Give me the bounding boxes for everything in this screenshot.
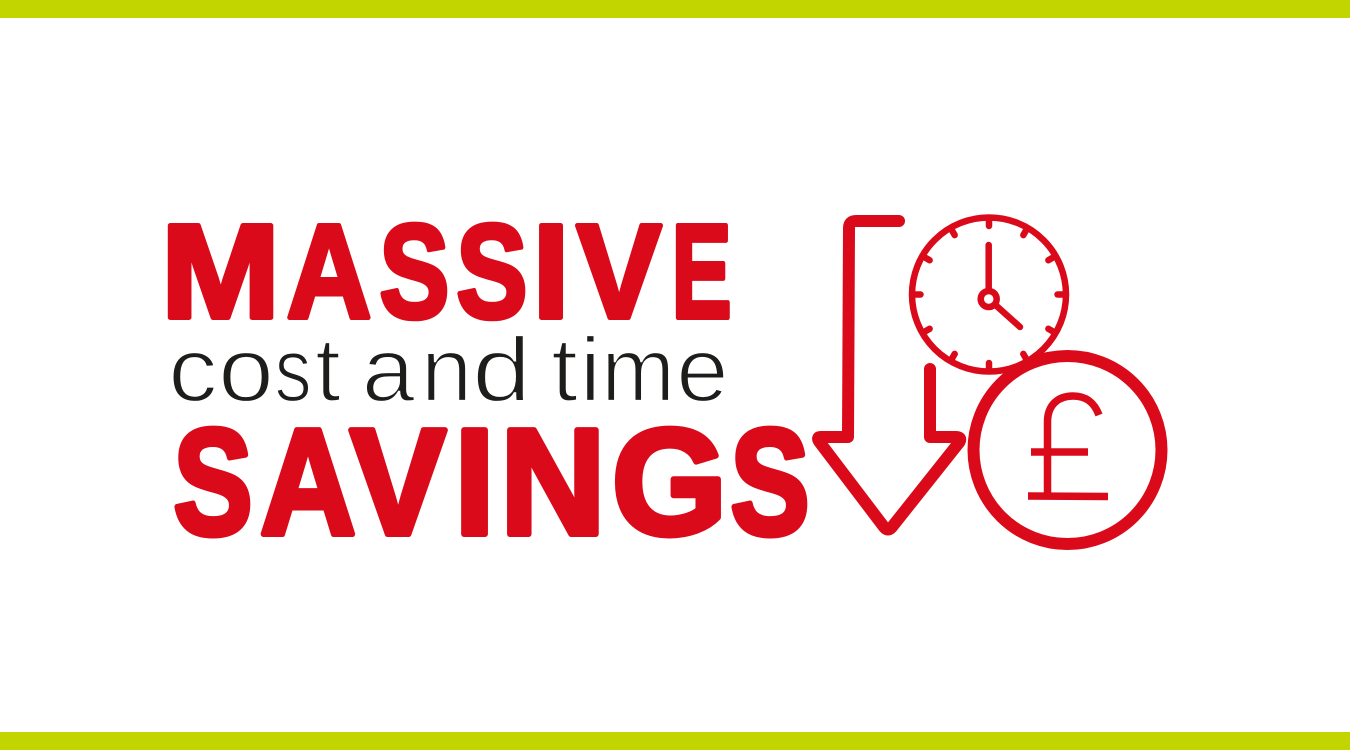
heading: SAVINGS: I xyxy=(454,397,495,566)
heading: MASSIVE: A xyxy=(286,198,372,346)
heading: SAVINGS: S xyxy=(730,397,810,566)
subheading: cost and time: s xyxy=(275,320,312,421)
icon: down arrow xyxy=(818,221,960,530)
heading: MASSIVE: I xyxy=(533,198,569,346)
coin ring xyxy=(974,356,1162,544)
subheading: cost and time: m xyxy=(601,320,675,421)
icon: pound coin xyxy=(974,356,1162,544)
heading: MASSIVE: M xyxy=(161,198,280,346)
subheading: cost and time: a xyxy=(362,320,415,421)
bottom green bar xyxy=(0,732,1350,750)
heading: SAVINGS: S xyxy=(173,397,253,566)
clock hands xyxy=(981,245,1020,327)
heading: MASSIVE: E xyxy=(672,198,732,346)
clock face xyxy=(912,218,1066,372)
heading: MASSIVE: S xyxy=(456,198,528,346)
pound symbol xyxy=(1028,396,1108,496)
subheading: cost and time: t xyxy=(315,320,341,421)
subheading: cost and time: o xyxy=(218,320,274,421)
subheading: cost and time: e xyxy=(676,320,729,421)
heading: SAVINGS: A xyxy=(260,397,356,566)
heading: SAVINGS: N xyxy=(500,397,606,566)
subheading: cost and time: n xyxy=(421,320,472,421)
icon: clock xyxy=(912,218,1066,372)
subheading: cost and time: d xyxy=(472,320,531,421)
clock ticks xyxy=(916,221,1062,368)
subheading: cost and time: c xyxy=(168,320,218,421)
heading: SAVINGS: G xyxy=(612,397,727,566)
heading: MASSIVE: V xyxy=(576,198,662,346)
subheading: cost and time: i xyxy=(579,320,601,421)
top green bar xyxy=(0,0,1350,18)
subheading: cost and time: t xyxy=(551,320,578,421)
heading: MASSIVE: S xyxy=(379,198,449,346)
heading: SAVINGS: V xyxy=(350,397,446,566)
